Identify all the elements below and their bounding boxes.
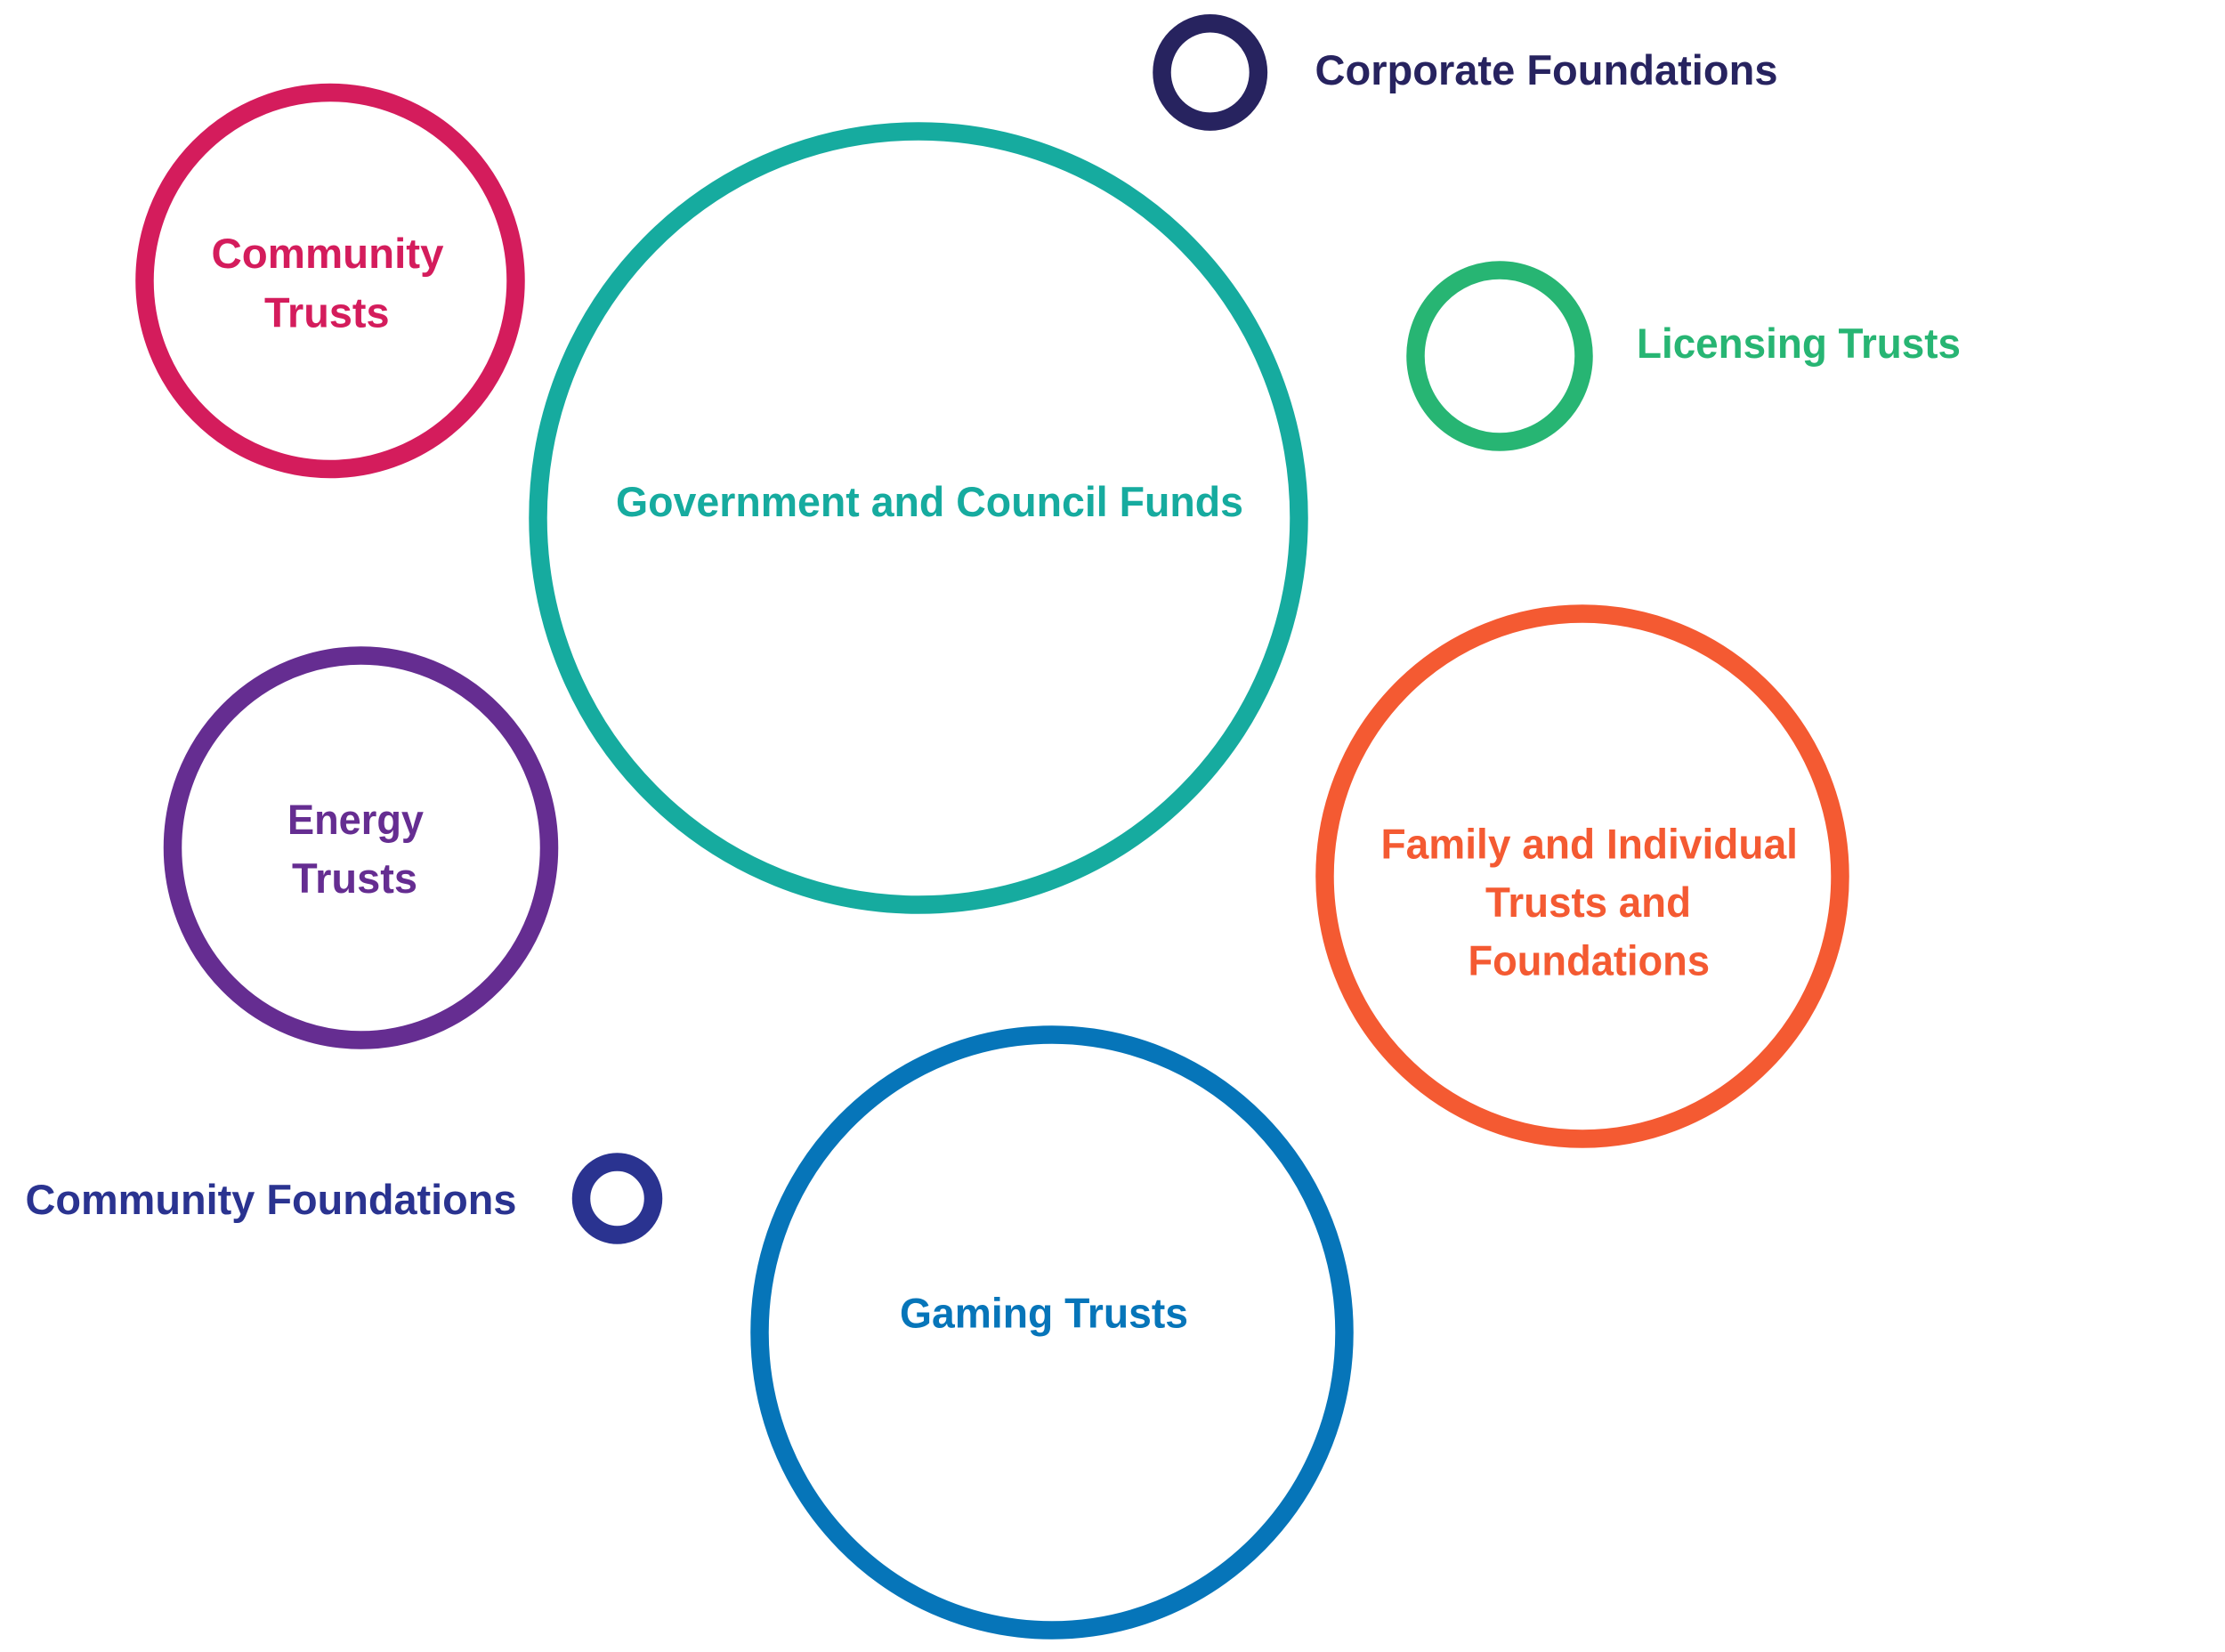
bubble: Energy Trusts	[173, 655, 549, 1040]
bubble: Government and Council Funds: Government and Council Funds	[616, 479, 1243, 526]
bubble: Community Trusts: Community	[212, 231, 444, 278]
bubble: Community Foundations	[25, 1162, 653, 1235]
bubble: Corporate Foundations	[1162, 23, 1778, 122]
bubble: Community Foundations: Community Foundations	[25, 1177, 516, 1224]
bubble: Family and Individual Trusts and Foundations: Foundations	[1468, 938, 1710, 984]
bubble: Family and Individual Trusts and Foundations: Trusts and	[1485, 879, 1691, 927]
bubble: Gaming Trusts	[760, 1034, 1344, 1631]
bubble: Licensing Trusts: Licensing Trusts	[1637, 320, 1961, 368]
bubble: Gaming Trusts: Gaming Trusts	[900, 1291, 1188, 1337]
bubble: Community Trusts: Trusts	[264, 289, 390, 336]
bubble: Government and Council Funds	[538, 132, 1299, 904]
bubble: Energy Trusts: Trusts	[292, 855, 417, 903]
bubble: Energy Trusts: Energy	[287, 797, 425, 844]
bubble: Licensing Trusts	[1415, 271, 1961, 441]
bubble: Corporate Foundations: Corporate Foundations	[1315, 47, 1778, 94]
bubble: Community Trusts	[144, 93, 516, 469]
bubble: Family and Individual Trusts and Foundations	[1324, 614, 1841, 1139]
bubble: Family and Individual Trusts and Foundations: Family and Individual	[1381, 821, 1798, 869]
